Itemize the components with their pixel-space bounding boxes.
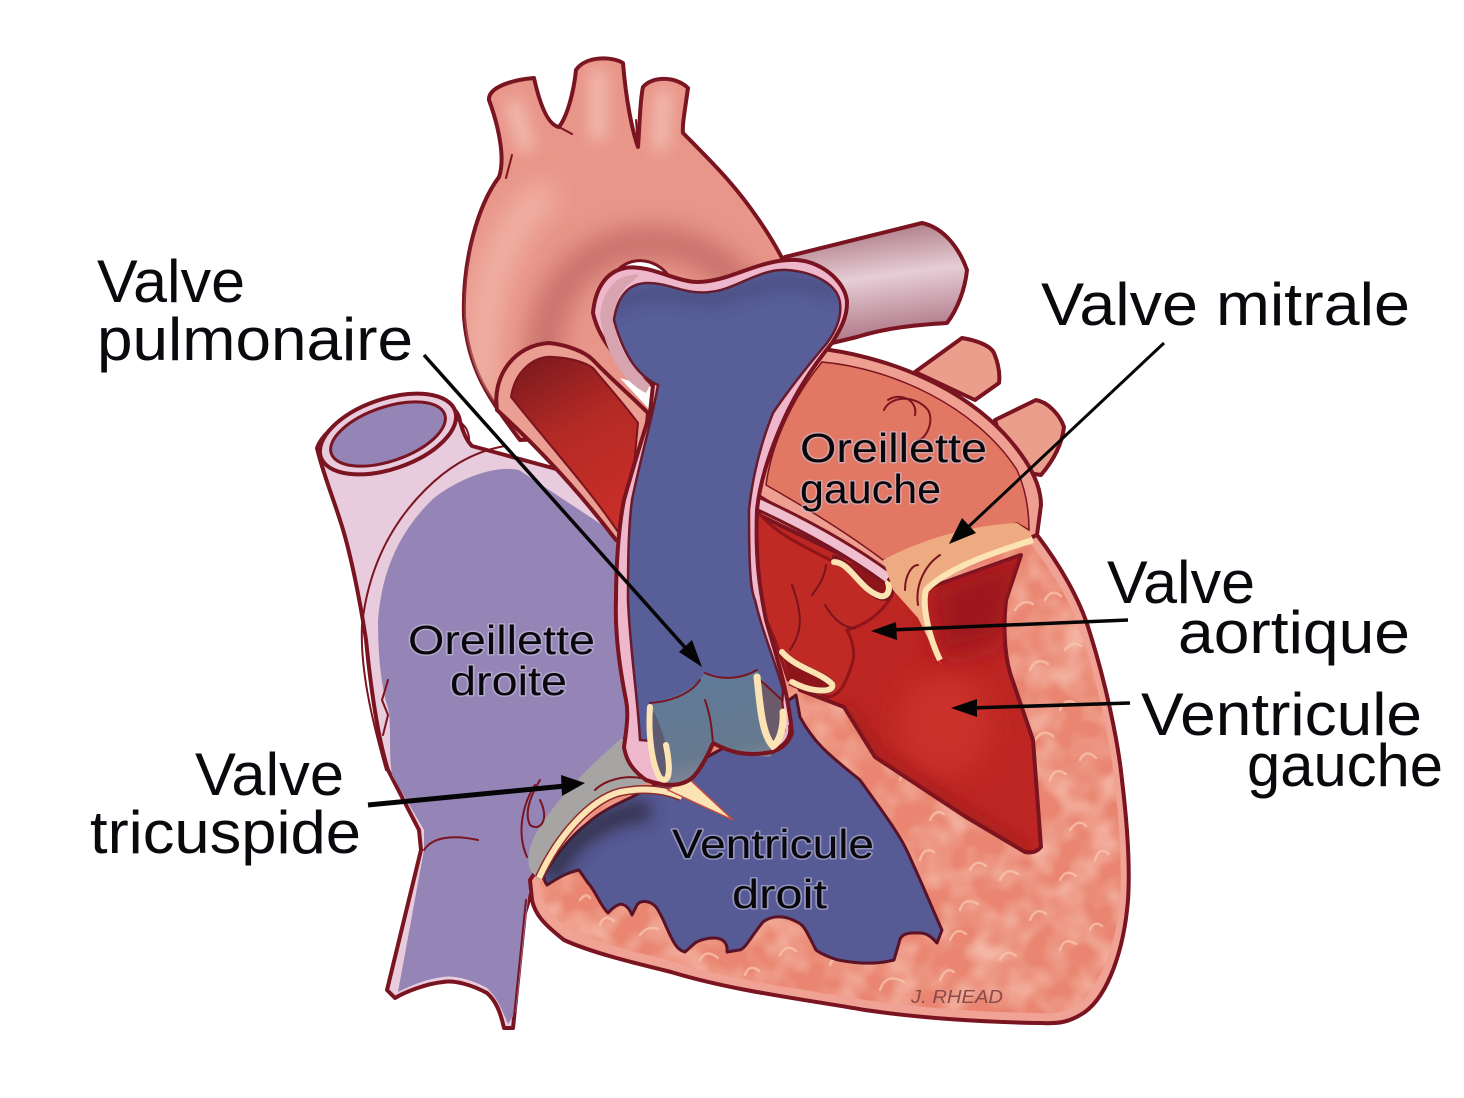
tricuspid leaflet edge [539,776,733,878]
label: ventricule gauche: gauche [1247,732,1443,799]
heart illustration [309,58,1160,1040]
aortic valve cusps [832,558,891,597]
valve cusp right [757,677,784,747]
pulmonary artery trunk [593,260,847,785]
tricuspid valve [522,738,660,880]
label: valve pulmonaire [97,248,413,373]
label: valve pulmonaire: Valve [97,248,245,315]
label: ventricule droit: droit [732,871,828,917]
label: valve aortique [1107,549,1410,666]
white gap beside trunk [620,378,654,410]
label: valve aortique: aortique [1178,599,1410,666]
label: valve mitrale: Valve mitrale [1041,271,1410,338]
label: oreillette gauche: Oreillette [800,425,987,471]
vena cava opening [309,378,467,490]
arrow: ventricule gauche [951,699,1130,717]
superior and inferior vena cava, right atrium [309,378,640,1028]
white gap above pulmonary artery [616,261,668,275]
label: ventricule gauche [1141,681,1443,799]
arrow: valve mitrale [949,343,1164,544]
right ventricle cavity [539,695,942,963]
label: oreillette droite: droite [450,658,567,704]
pulmonary valve [646,670,790,785]
aorta [464,58,782,440]
label: valve aortique: Valve [1107,549,1255,616]
heart muscle wall [528,513,1131,1026]
label: valve tricuspide [90,741,361,866]
arrow: valve aortique [871,620,1128,640]
label: oreillette gauche: gauche [800,466,941,512]
left ventricle cavity [753,512,1041,852]
label: valve tricuspide: tricuspide [90,799,361,866]
aortic root with cusps [757,510,891,697]
valve cusp left [649,707,669,780]
muscle fibre texture [580,593,1109,990]
artist signature: J. RHEAD [910,987,1003,1007]
pulmonary vein stubs [915,338,1064,475]
label: ventricule droit [672,821,874,917]
label: oreillette droite: Oreillette [408,617,595,663]
right pulmonary branch [785,223,967,343]
label: valve tricuspide: Valve [195,741,344,808]
label: valve pulmonaire: pulmonaire [97,306,413,373]
arrow: valve tricuspide [368,775,585,805]
label: oreillette gauche [800,425,987,512]
label: ventricule droit: Ventricule [672,821,874,867]
label: ventricule gauche: Ventricule [1141,681,1422,748]
mitral valve [883,523,1033,667]
ascending aorta opening [496,343,654,540]
left atrium [757,348,1041,580]
label: oreillette droite [408,617,595,704]
arrow: valve pulmonaire [424,355,702,667]
